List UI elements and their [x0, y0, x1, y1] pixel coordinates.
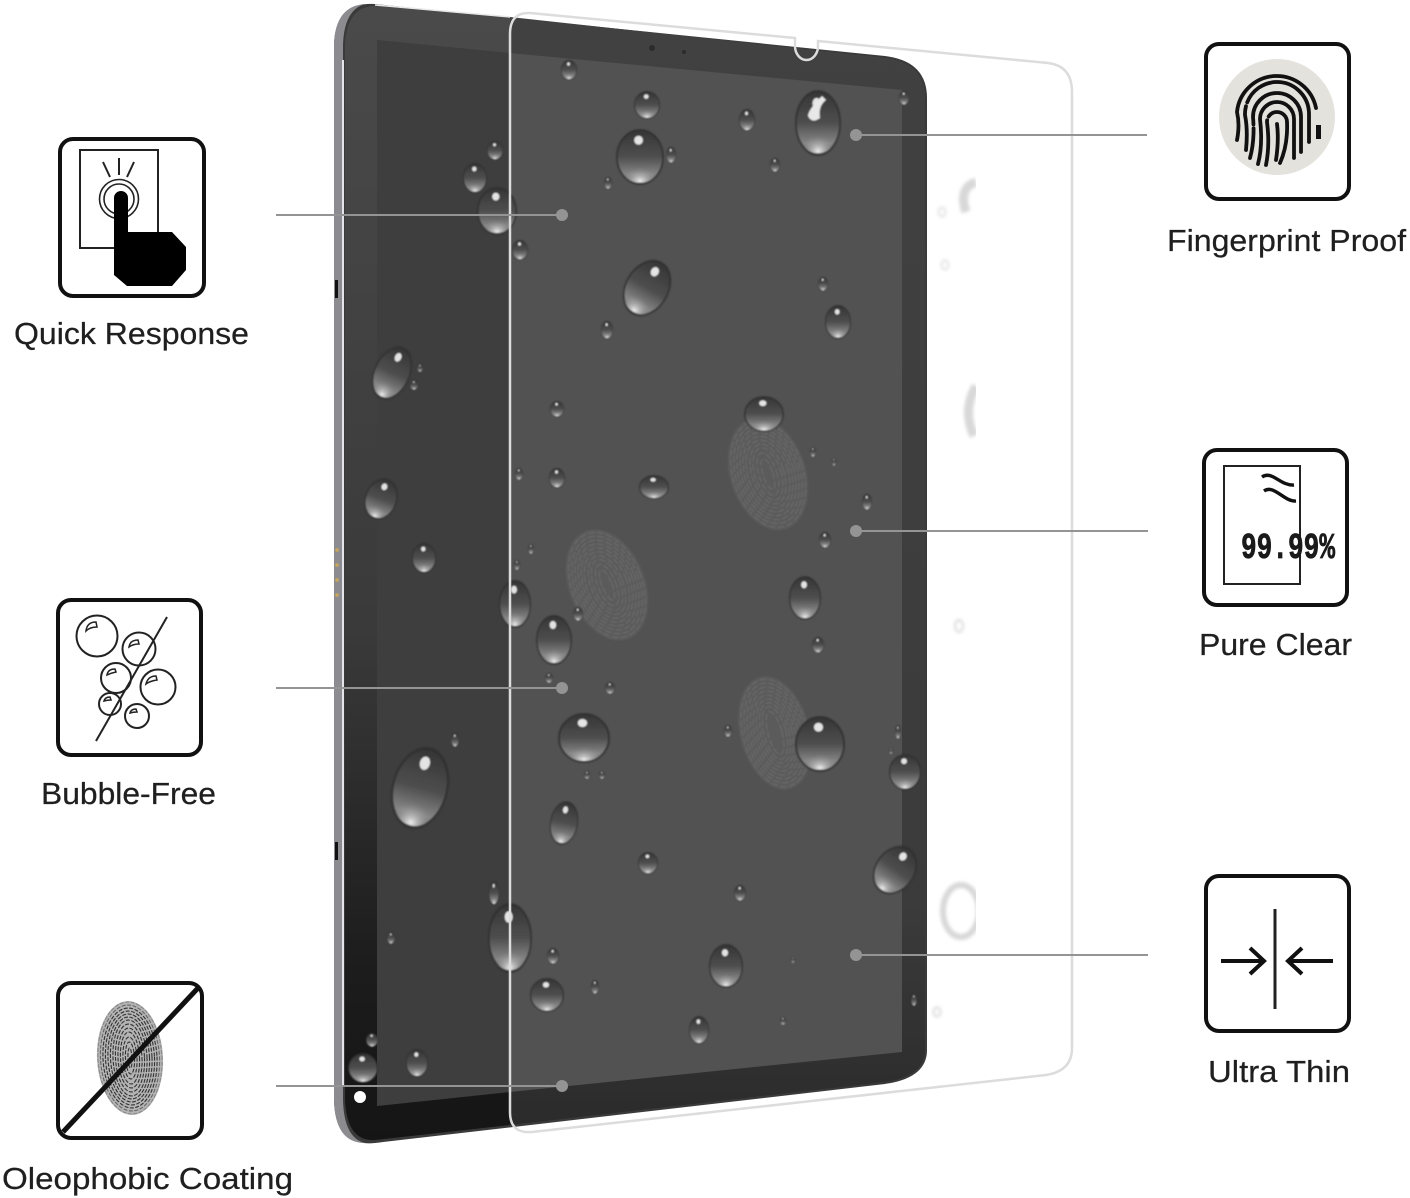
top edge highlight	[375, 5, 510, 17]
label: pure clear: Pure Clear	[1199, 627, 1352, 662]
icon: oleophobic coating	[58, 983, 202, 1138]
label: bubble-free: Bubble-Free	[41, 776, 216, 811]
tablet bezel under film	[510, 17, 925, 1125]
icon: bubble-free	[58, 600, 201, 755]
callout: pure clear	[850, 525, 1148, 537]
label: fingerprint proof: Fingerprint Proof	[1167, 223, 1406, 258]
label: oleophobic coating: Oleophobic Coating	[2, 1161, 293, 1196]
icon: quick response	[60, 139, 204, 296]
bright droplet highlight	[354, 1091, 366, 1103]
tablet	[334, 4, 927, 1143]
callout: quick response	[276, 209, 568, 221]
large drop highlight	[808, 96, 826, 121]
tablet bezel left of film	[345, 6, 510, 1140]
label: quick response: Quick Response	[14, 316, 249, 351]
smudged fingerprints on screen	[550, 407, 824, 798]
callout: bubble-free	[276, 682, 568, 694]
pogo pins	[335, 548, 339, 597]
label: ultra thin: Ultra Thin	[1208, 1054, 1350, 1089]
camera dots	[649, 45, 686, 54]
icon: ultra thin	[1206, 876, 1349, 1031]
icon: pure clear: 99.99%	[1241, 528, 1335, 569]
left frame highlight	[342, 60, 344, 1085]
screen left of film	[377, 40, 510, 1106]
side buttons	[335, 280, 338, 860]
screen under film	[510, 53, 902, 1092]
ghost droplets on film	[934, 182, 979, 1016]
tablet body outline	[334, 4, 927, 1143]
callout lines	[276, 129, 1148, 1092]
callout: fingerprint proof	[850, 129, 1147, 141]
black fingerprint	[94, 999, 166, 1117]
icon: pure clear	[1204, 450, 1347, 605]
glass film outline	[510, 13, 1072, 1132]
icon: fingerprint proof	[1206, 44, 1349, 199]
callout: ultra thin	[850, 949, 1148, 961]
callout: oleophobic coating	[276, 1080, 568, 1092]
tablet frame silver left edge	[334, 4, 365, 1143]
water droplets	[349, 60, 925, 1082]
